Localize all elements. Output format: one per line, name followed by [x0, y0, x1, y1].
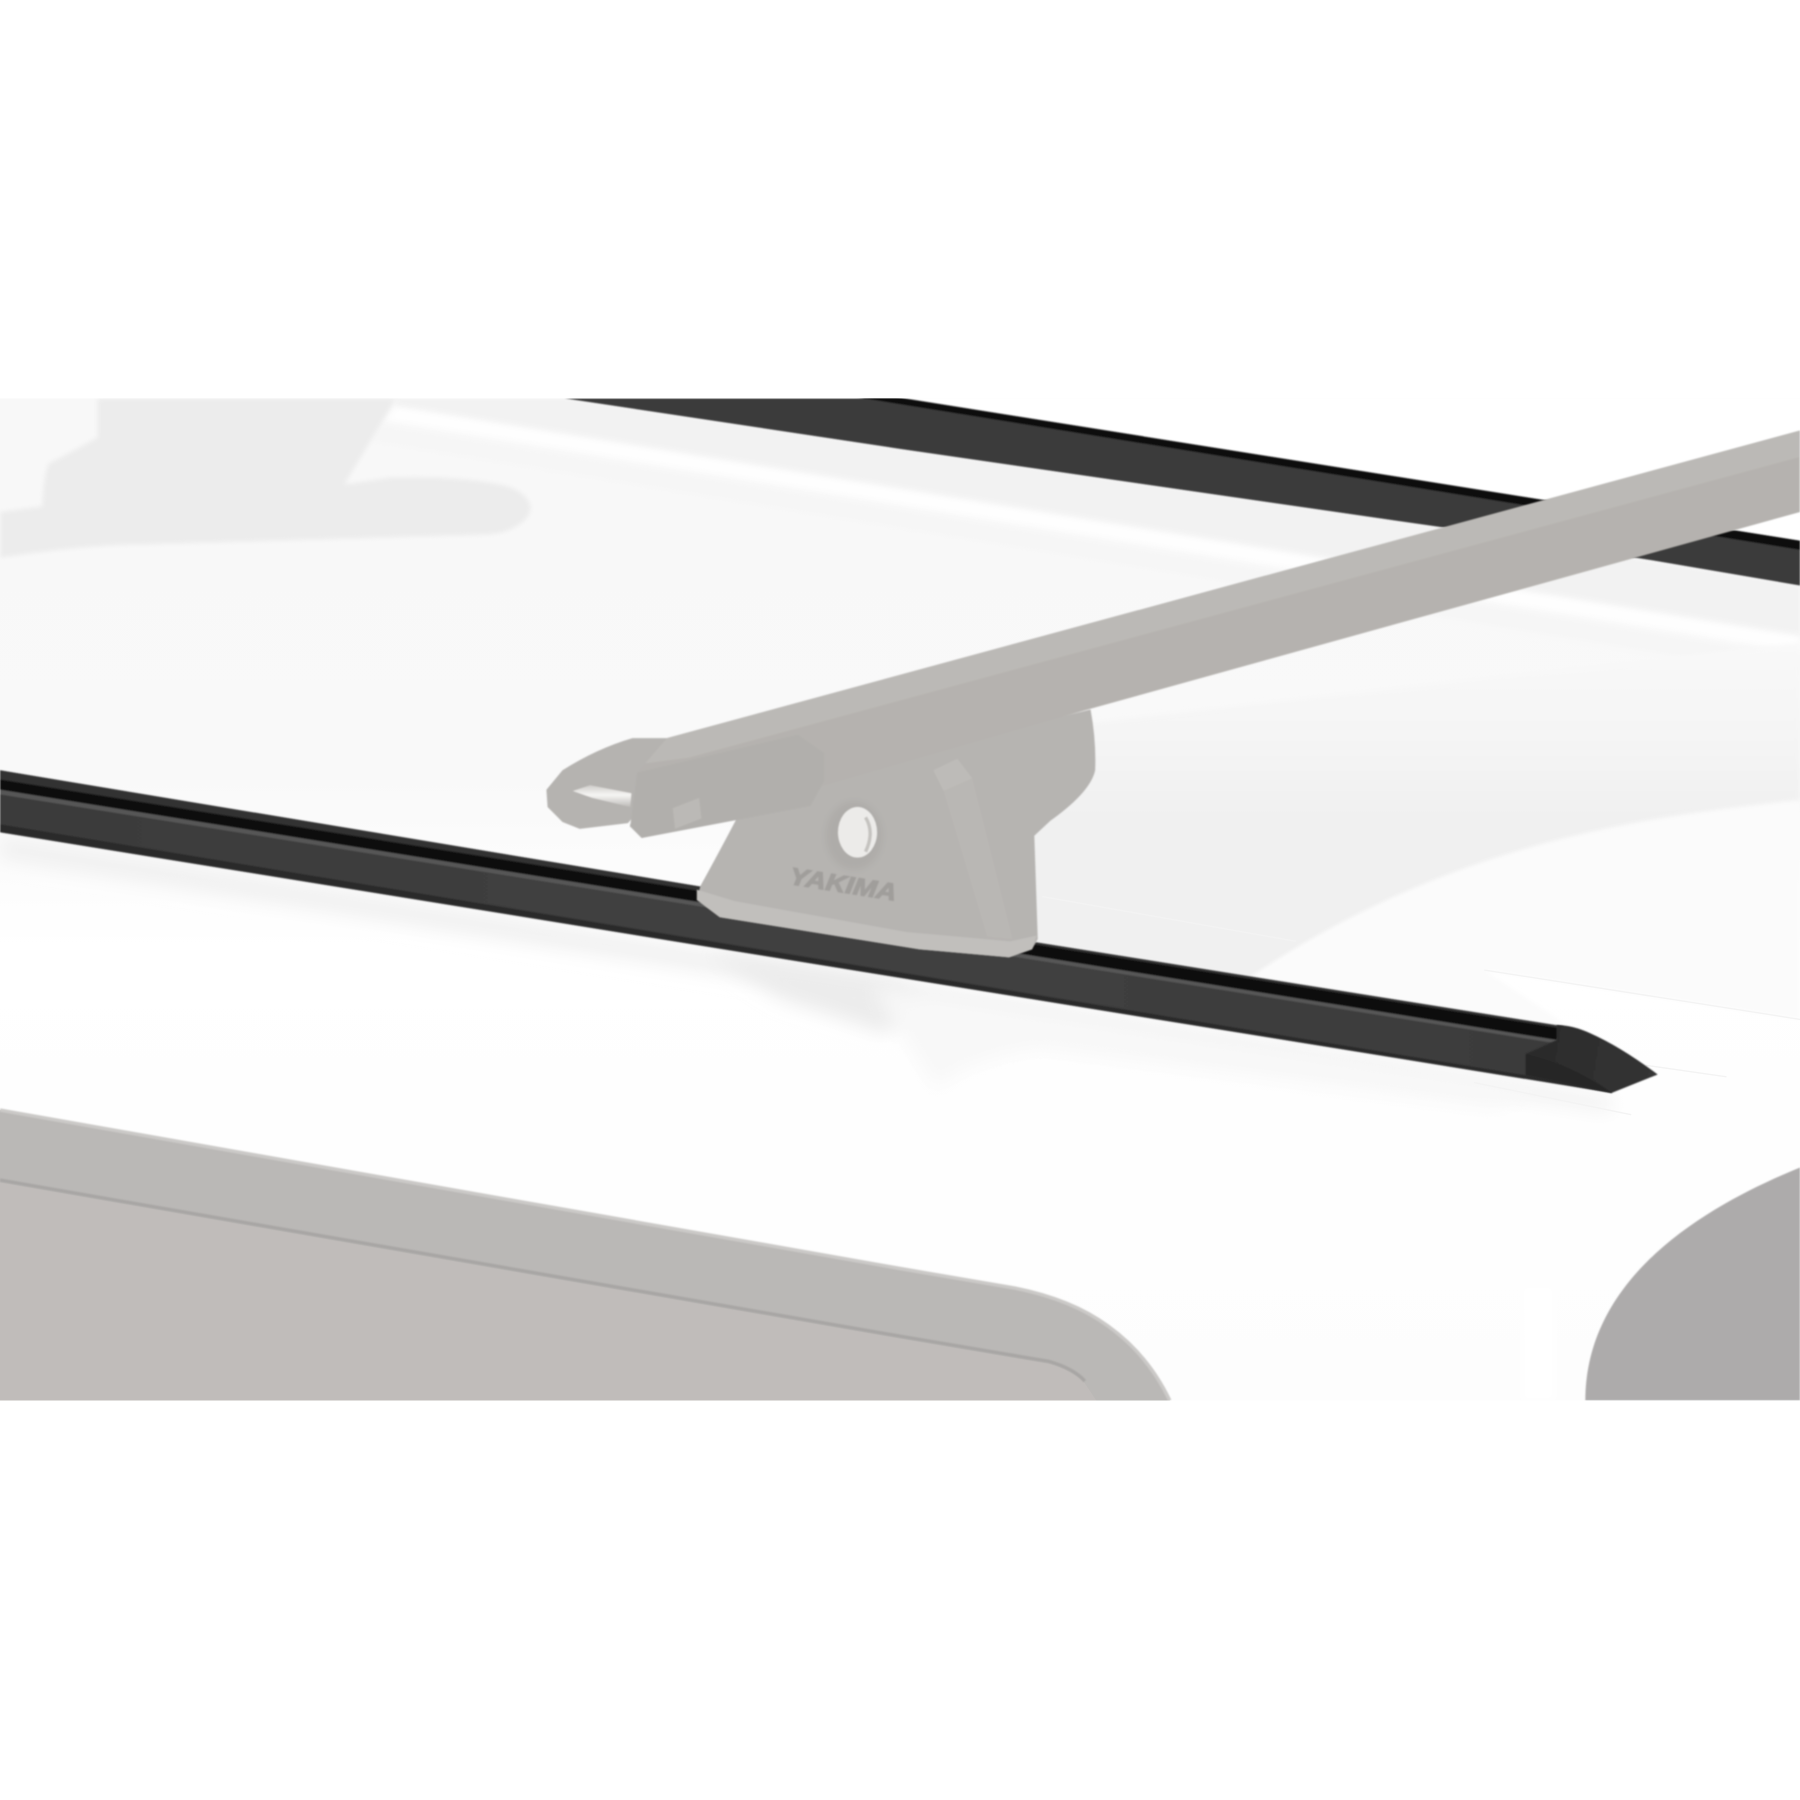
bolt recess — [825, 801, 883, 870]
side window panel — [0, 1110, 1170, 1401]
bolt head — [838, 807, 877, 858]
crossbar assembly — [546, 430, 1800, 957]
lower body highlight — [1522, 1286, 1554, 1401]
near roof rail — [0, 770, 1612, 1093]
mounting foot — [697, 709, 1095, 957]
reflection shadow on roof — [0, 398, 531, 558]
rail end cap — [1526, 1025, 1658, 1093]
foot facet — [933, 759, 972, 791]
crossbar end facet — [630, 808, 742, 838]
vehicle roof surface — [374, 398, 1800, 976]
product illustration: roof rail and crossbar — [0, 398, 1800, 1400]
brand logo: YAKIMA — [788, 863, 899, 907]
wheel arch panel — [1585, 1167, 1800, 1401]
image band — [0, 396, 1800, 1401]
far roof rail — [565, 396, 1800, 585]
faint body seams — [1486, 970, 1800, 1115]
lock pin — [573, 785, 631, 807]
shadow below near rail — [0, 836, 1612, 1111]
crossbar tube — [660, 456, 1800, 776]
lock loop — [546, 738, 667, 829]
